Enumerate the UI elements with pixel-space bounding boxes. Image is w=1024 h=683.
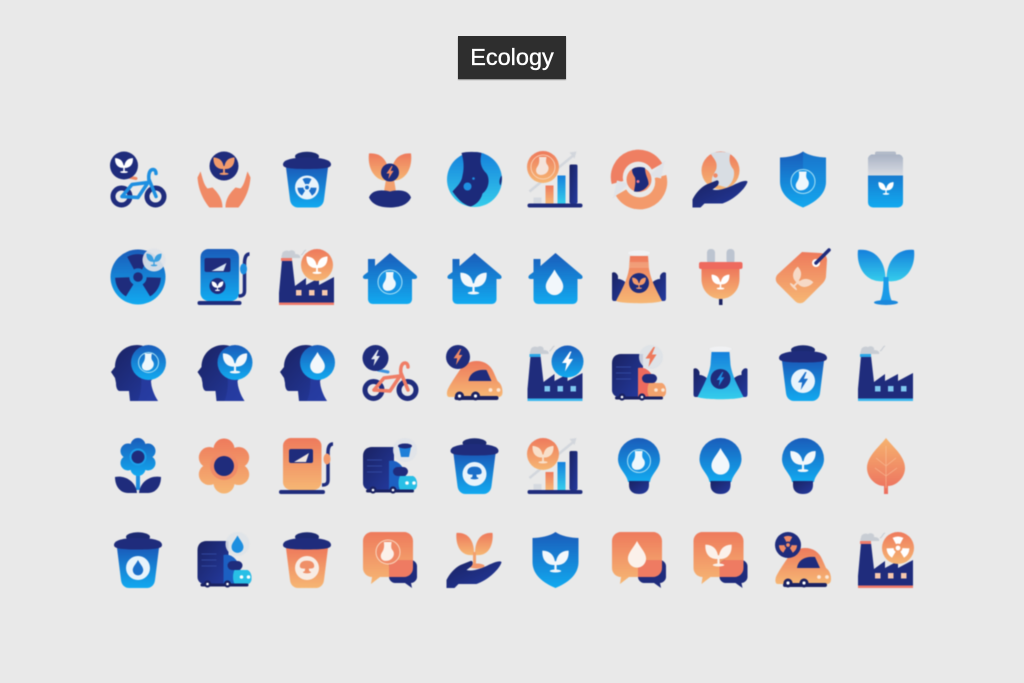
icon: orange fuel pump [279,438,333,494]
icon: head with earth [111,345,166,401]
icon: hands holding sprout [198,152,250,208]
icon: factory with radiation bubble [858,532,914,588]
icon: battery with sprout [868,152,903,208]
icon: head with sprout [198,345,252,401]
icon: trash can with mushroom cloud [450,438,498,494]
icon: shield with earth [780,152,826,208]
icon: orange leaf [867,438,905,494]
title [458,36,566,79]
icon: charging pump with sprout [198,249,250,305]
icon: earth growth chart [527,151,582,208]
icon: radiation globe [110,248,166,304]
icon: orange power plant with sprout [612,250,666,303]
icon: trash can with radiation [283,152,331,208]
icon: car with bolt [446,345,502,400]
icon: chat bubble with sprout [694,532,748,588]
icon: truck with bolt [612,345,666,401]
icon: house with sprout [447,253,502,304]
icon: orange flower [199,438,249,494]
icon: blue power plant with bolt [694,346,748,399]
icon: blue sprout [858,250,914,305]
icon: factory with bolt bubble [528,346,584,401]
icon: earth recycling arrows [613,156,665,203]
icon: chat bubble with earth [363,532,417,588]
icon: light bulb with drop [700,438,742,494]
icon: car with radiation [775,532,831,588]
icon: sprout with bolt [369,153,411,208]
icon: eco price tag [776,250,829,303]
icon: bicycle with sprout [110,152,164,205]
icon: factory with sprout bubble [279,249,334,305]
icon: hand holding sprout [446,533,502,588]
icon: house with drop [528,253,583,304]
icon: truck with drop bubble [198,532,252,588]
icon: chat bubble with drop [612,532,666,588]
icon: truck with trash bubble [363,438,417,494]
icon: house with earth [363,253,417,304]
icon: hand holding earth [692,152,748,208]
icon: trash can with drop [114,532,162,588]
icon: shield with sprout [532,532,578,588]
icon: blue flower [115,438,161,493]
icon: earth globe [447,152,502,207]
icon: power plug with sprout [699,249,742,305]
icon: trash can with bolt [779,345,827,401]
title: Ecology [470,44,554,70]
icon: light bulb with earth [618,438,660,494]
icon: head with drop [280,345,335,401]
icon: light bulb with sprout [782,438,824,494]
icon: orange trash can with mushroom cloud [283,532,331,588]
icon: sprout growth chart [527,438,582,494]
icon: bicycle with bolt [362,345,416,398]
icon: factory with smoke [858,346,913,401]
